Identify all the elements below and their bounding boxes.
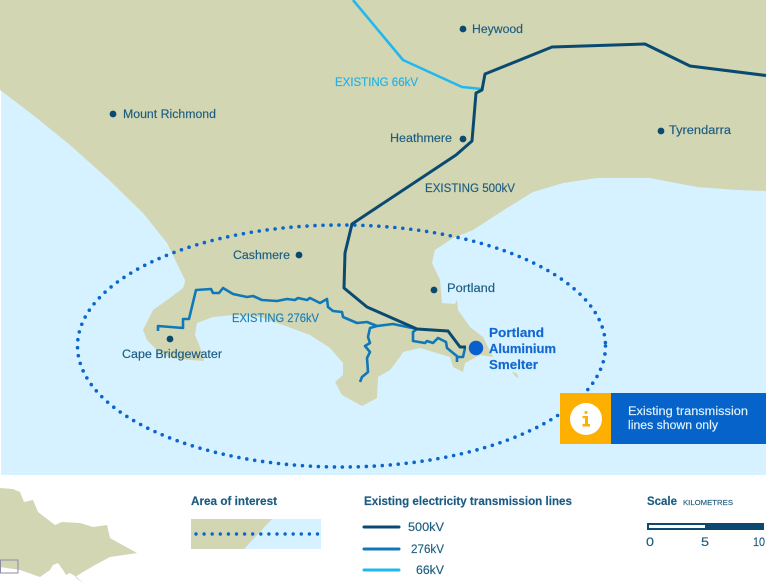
land [0,0,766,406]
place: Heathmere: Heathmere [390,133,452,145]
place: Cape Bridgewater [122,336,222,361]
label: existing 500kV: EXISTING 500kV [425,183,515,195]
legend row: 66kV: 66kV [416,565,444,577]
legend: scale: 0 [646,537,654,549]
66kV line [353,0,482,89]
callout text [628,406,748,432]
place: Cape Bridgewater: Cape Bridgewater [122,349,222,361]
500kV line [344,44,766,347]
legend row: 500kV [364,522,444,534]
place: Portland Aluminium Smelter: Portland [489,326,544,340]
276kV line [158,288,465,382]
place: Tyrendarra: Tyrendarra [669,125,732,137]
legend row: 66kV [364,565,444,577]
area of interest ellipse [78,225,606,467]
callout: existing lines notice [560,393,766,444]
callout text: Existing transmission [628,406,748,418]
place: Portland: Portland [447,283,495,295]
legend: scale: Scale [647,496,677,508]
legend: scale: KILOMETRES [683,498,733,507]
place: Portland Aluminium Smelter: Smelter [489,358,538,372]
label: existing 276kV: EXISTING 276kV [232,313,319,325]
callout text: lines shown only [628,420,718,432]
place: Portland Aluminium Smelter: Aluminium [489,342,556,356]
island [512,372,519,378]
place: Cashmere: Cashmere [233,250,290,262]
place: Mount Richmond: Mount Richmond [123,109,216,121]
legend row: 500kV: 500kV [408,522,444,534]
legend: scale [646,496,765,549]
legend: scale: 5 [701,537,709,549]
locator map: Victoria [0,488,137,583]
legend: area of interest: Area of interest [191,496,277,508]
legend row: 276kV [364,544,444,556]
scale bar [647,523,764,530]
legend: transmission lines: Existing electricity transmission lines [364,496,572,508]
place: Heywood: Heywood [472,24,523,36]
legend: transmission lines [364,496,572,577]
icon: info [570,403,602,435]
legend row: 276kV: 276kV [411,544,444,556]
legend: scale: 10 [753,537,765,549]
place: Portland [431,283,495,295]
label: existing 66kV: EXISTING 66kV [335,77,418,89]
legend: area of interest [191,496,321,549]
place: Portland Aluminium Smelter [469,326,556,372]
